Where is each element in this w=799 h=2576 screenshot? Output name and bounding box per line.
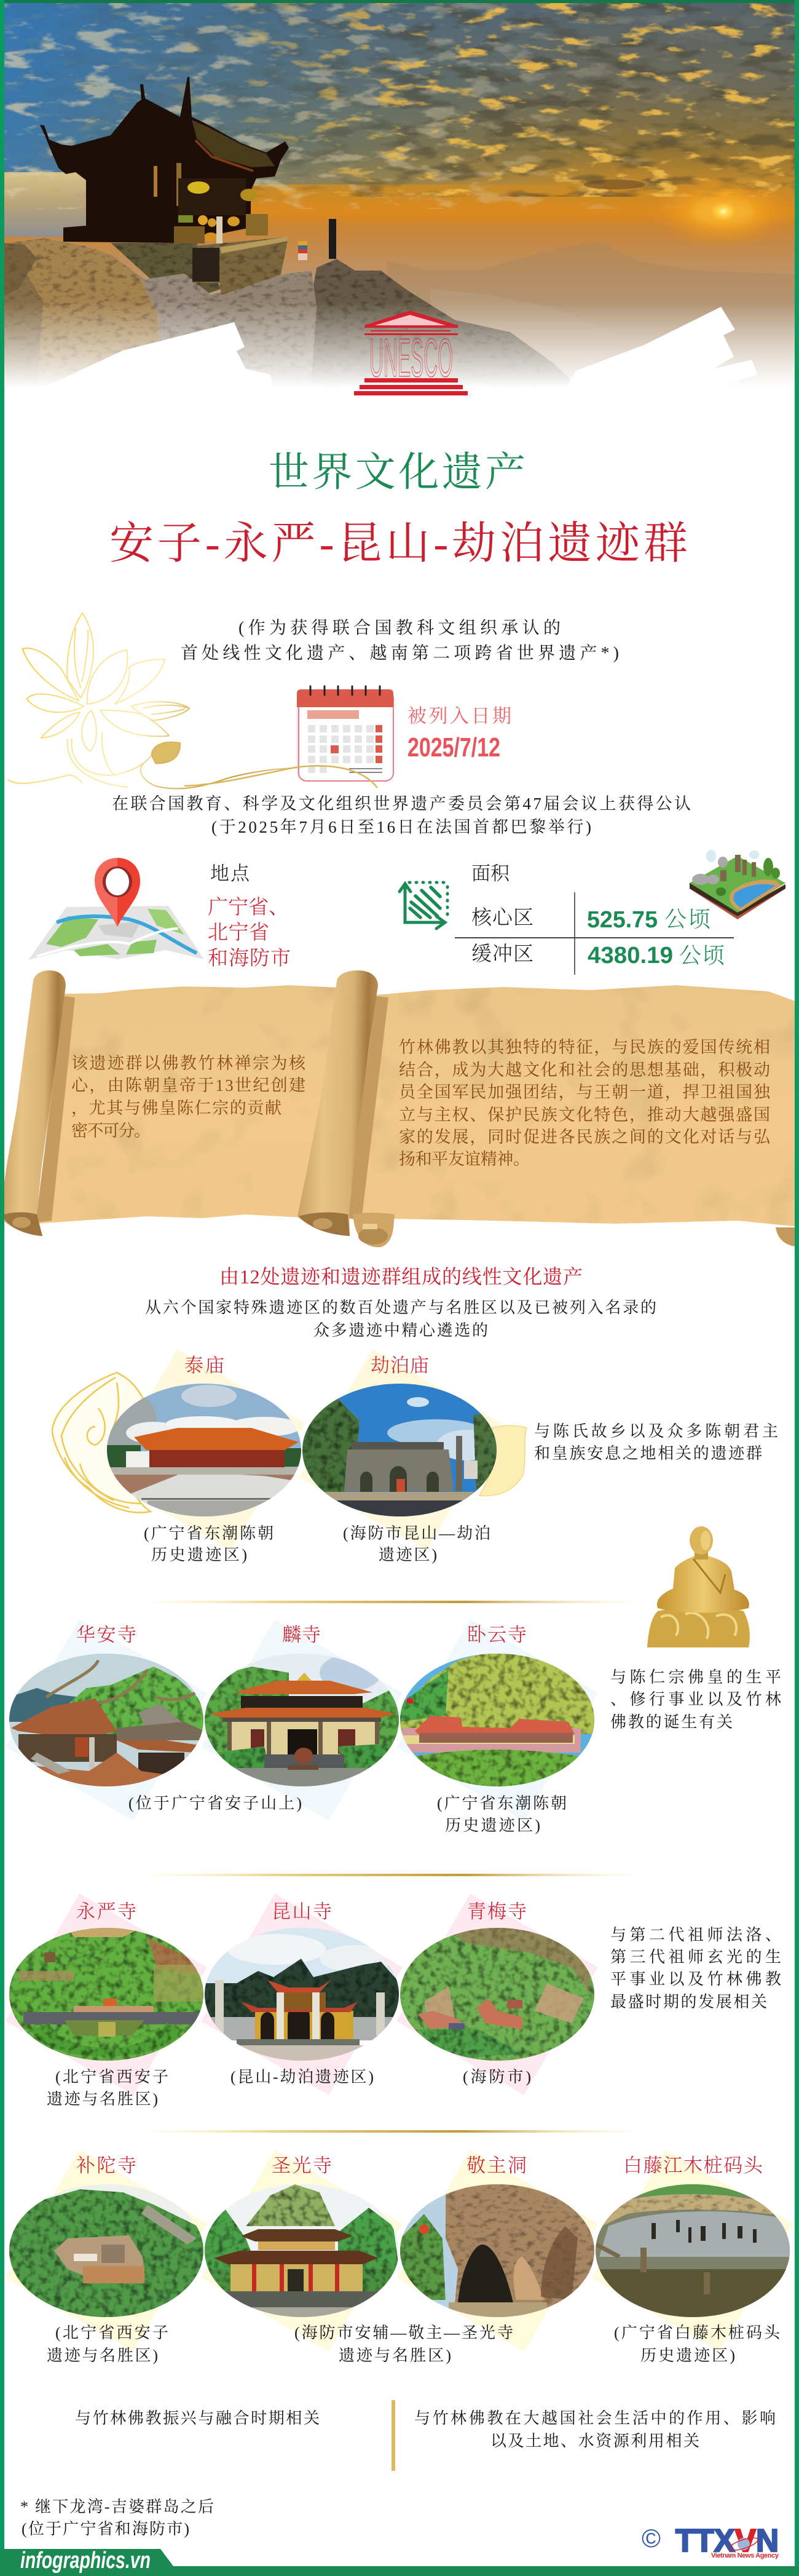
pale flags row 3	[6, 1893, 598, 2095]
photo: 永严寺	[9, 1928, 204, 2061]
icon: area	[399, 882, 447, 929]
description: 在联合国教育、科学及文化组织世界遗产委员会第47届会议上获得公认	[112, 795, 691, 813]
area table	[455, 863, 734, 975]
photo: 昆山寺	[205, 1928, 400, 2063]
text: row 3: 最盛时期的发展相关	[610, 1993, 767, 2011]
text: row 3: 第三代祖师玄光的生	[610, 1948, 781, 1966]
text: row 1: (广宁省东潮陈朝	[144, 1524, 274, 1542]
text: row 3: 昆山寺	[272, 1901, 332, 1922]
area table: 面积	[471, 863, 510, 884]
hero photo: sunset over mountain temple	[0, 0, 799, 394]
TTXVN logo: ©	[642, 2524, 661, 2553]
icon: calendar	[297, 686, 393, 782]
icon: golden lotus	[8, 613, 307, 788]
flag and stele	[329, 219, 336, 259]
text: row 3: 与第二代祖师法洛、	[610, 1926, 781, 1944]
text: row 4: 遗迹与名胜区)	[47, 2347, 158, 2364]
pale flags row 1	[103, 1349, 500, 1551]
text: row 1: 和皇族安息之地相关的遗迹群	[534, 1445, 762, 1462]
area table: 公顷	[679, 943, 725, 968]
text: row 2: 华安寺	[76, 1624, 136, 1646]
photo: 麟寺	[205, 1654, 400, 1788]
location text: 和海防市	[208, 947, 291, 970]
subtitle	[181, 618, 619, 663]
location text: 地点	[210, 863, 250, 884]
top border strip	[0, 0, 799, 3]
text: row 1: 泰庙	[184, 1355, 224, 1376]
location text: 北宁省	[208, 921, 269, 944]
photo: 青梅寺	[400, 1928, 596, 2061]
text: row 4: (海防市安辅—敬主—圣光寺	[294, 2324, 513, 2342]
area table: 525.75	[587, 907, 658, 933]
photo: 劫泊庙	[302, 1384, 498, 1519]
text: row 2: 与陈仁宗佛皇的生平	[610, 1668, 781, 1686]
text: row 2: 历史遗迹区)	[445, 1817, 540, 1834]
icon: map pin	[28, 858, 204, 960]
section intro: 从六个国家特殊遗迹区的数百处遗产与名胜区以及已被列入名录的	[145, 1299, 656, 1317]
footer band: infographics.vn	[20, 2548, 151, 2574]
altar stone wall	[192, 237, 288, 295]
scroll text: right: 结合，成为大越文化和社会的思想基础，积极动	[399, 1061, 770, 1079]
text: row 2: 麟寺	[282, 1624, 321, 1646]
photo: 敬主洞	[400, 2184, 596, 2318]
pale flags row 2	[6, 1619, 598, 1821]
panel: left scroll	[0, 970, 339, 1236]
listing date: 被列入日期	[407, 705, 511, 727]
subtitle: (作为获得联合国教科文组织承认的	[238, 618, 561, 638]
text: row 1: (海防市昆山—劫泊	[343, 1524, 490, 1542]
scroll text: left	[71, 1054, 306, 1140]
text: row 4: (北宁省西安子	[55, 2324, 168, 2342]
divider	[153, 1601, 632, 1603]
text: row 1: 遗迹区)	[379, 1546, 437, 1564]
listing date	[407, 705, 511, 763]
infographic canvas: UNESCO	[369, 327, 453, 388]
scroll text: right: 员全国军民加强团结，与王朝一道，捍卫祖国独	[399, 1083, 771, 1101]
temple silhouette	[40, 77, 289, 243]
title: red: 安子-永严-昆山-劫泊遗迹群	[109, 519, 688, 568]
text: row 3: 遗迹与名胜区)	[47, 2090, 158, 2108]
pale flags row 4	[6, 2150, 793, 2352]
scroll text: right: 竹林佛教以其独特的特征，与民族的爱国传统相	[399, 1038, 770, 1056]
section heading: 由12处遗迹和遗迹群组成的线性文化遗产	[219, 1266, 583, 1288]
text: row 1: 历史遗迹区)	[151, 1546, 247, 1564]
scroll text: left: 心，由陈朝皇帝于13世纪创建	[71, 1076, 305, 1095]
photo: 圣光寺	[205, 2184, 400, 2318]
scroll text: left: 密不可分。	[71, 1122, 151, 1140]
bottom notes: 与竹林佛教振兴与融合时期相关	[75, 2409, 320, 2427]
text: row 3: (海防市)	[463, 2068, 531, 2086]
scroll text: right: 扬和平友谊精神。	[399, 1150, 530, 1168]
divider	[153, 2130, 632, 2133]
text: row 4: 敬主洞	[466, 2155, 527, 2176]
area table: 4380.19	[588, 943, 673, 969]
scroll text: left: ，尤其与佛皇陈仁宗的贡献	[71, 1099, 281, 1117]
location text	[208, 863, 291, 970]
icon: land with surveyors	[690, 850, 785, 919]
scroll text: right: 家的发展，同时促进各民族之间的文化对话与弘	[399, 1128, 771, 1146]
description	[112, 795, 691, 836]
text: row 2: (位于广宁省安子山上)	[128, 1794, 302, 1812]
subtitle: 首处线性文化遗产、越南第二项跨省世界遗产*)	[181, 643, 619, 663]
photo: 华安寺	[9, 1654, 204, 1789]
text: row 4: 补陀寺	[76, 2155, 136, 2176]
UNESCO logo	[354, 311, 468, 395]
scroll text: left: 该遗迹群以佛教竹林禅宗为核	[71, 1054, 306, 1072]
text: row 2	[76, 1624, 781, 1834]
text: row 1: 与陈氏故乡以及众多陈朝君主	[534, 1422, 778, 1440]
text: row 4: 历史遗迹区)	[640, 2347, 735, 2364]
text: row 4: 遗迹与名胜区)	[339, 2347, 451, 2364]
location text: 广宁省、	[208, 896, 289, 919]
TTXVN logo: TTXVN	[675, 2523, 779, 2559]
text: row 3	[47, 1901, 781, 2108]
text: row 4: 圣光寺	[272, 2155, 332, 2176]
TTXVN logo: Vietnam News Agency	[711, 2552, 779, 2559]
text: row 4	[47, 2155, 781, 2364]
panel: right scroll	[297, 970, 799, 1247]
photo: 白藤江木桩码头	[596, 2184, 791, 2318]
text: row 4: (广宁省白藤木桩码头	[614, 2324, 781, 2342]
bottom notes: 以及土地、水资源利用相关	[490, 2432, 699, 2450]
text: row 2: 、修行事业以及竹林	[610, 1690, 781, 1708]
bottom notes: 与竹林佛教在大越国社会生活中的作用、影响	[414, 2409, 776, 2427]
photo: 泰庙	[107, 1384, 301, 1516]
bottom notes	[75, 2400, 776, 2471]
divider	[153, 1874, 632, 1876]
text: row 3: 永严寺	[76, 1901, 136, 1922]
scroll text: right	[399, 1038, 771, 1168]
photo: 卧云寺	[400, 1654, 596, 1787]
text: row 2: 卧云寺	[467, 1624, 527, 1646]
title: green: 世界文化遗产	[269, 450, 525, 495]
gold ornament right	[479, 1425, 527, 1496]
icon: golden Buddha statue	[647, 1526, 750, 1647]
footnote: (位于广宁省和海防市)	[22, 2520, 189, 2538]
footnote: * 继下龙湾-吉婆群岛之后	[20, 2498, 214, 2516]
section intro: 众多遗迹中精心遴选的	[313, 1322, 488, 1339]
text: row 1	[144, 1355, 778, 1564]
gold ornament left	[52, 1373, 151, 1513]
area table: 公顷	[664, 907, 710, 932]
text: row 2: (广宁省东潮陈朝	[437, 1794, 567, 1812]
text: row 4: 白藤江木桩码头	[623, 2155, 763, 2176]
area table: 核心区	[471, 906, 533, 929]
text: row 2: 佛教的诞生有关	[610, 1713, 733, 1731]
listing date: 2025/7/12	[407, 732, 500, 763]
photo: 补陀寺	[9, 2184, 204, 2318]
section intro	[145, 1299, 656, 1339]
text: row 3: (昆山-劫泊遗迹区)	[230, 2068, 374, 2086]
scroll text: right: 立与主权、保护民族文化特色，推动大越强盛国	[399, 1106, 770, 1124]
text: row 3: (北宁省西安子	[55, 2068, 168, 2086]
footnote	[20, 2498, 214, 2538]
footer band	[0, 2548, 799, 2576]
description: (于2025年7月6日至16日在法国首都巴黎举行)	[211, 818, 591, 836]
text: row 1: 劫泊庙	[371, 1355, 429, 1376]
text: row 3: 平事业以及竹林佛教	[610, 1970, 781, 1988]
area table: 缓冲区	[471, 943, 533, 965]
text: row 3: 青梅寺	[467, 1901, 527, 1922]
